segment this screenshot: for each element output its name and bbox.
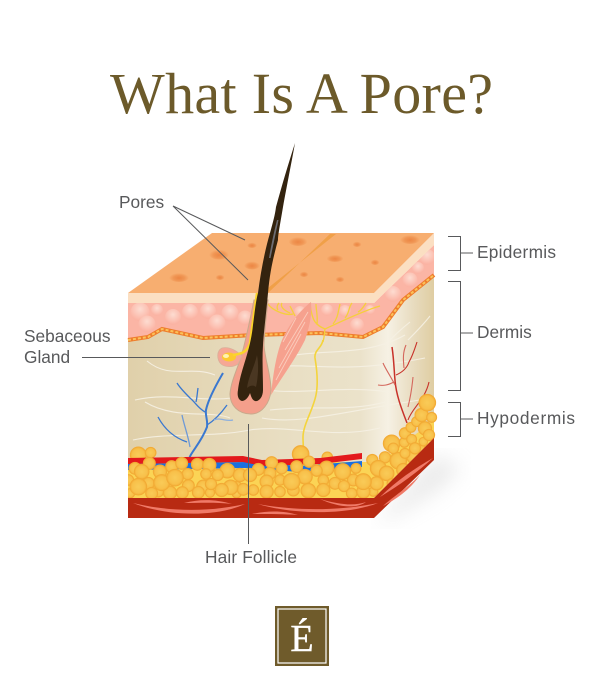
pink epidermis layer bbox=[128, 245, 434, 340]
blue vein branches bbox=[158, 373, 233, 462]
nerve fibre bbox=[303, 340, 323, 458]
bracket label: epidermis: Epidermis bbox=[477, 242, 556, 262]
bracket label: dermis: Dermis bbox=[477, 322, 532, 342]
fat cells bbox=[123, 408, 432, 499]
top cream edge bbox=[128, 233, 434, 303]
logo: É bbox=[290, 618, 314, 660]
callout: hair follicle: Hair Follicle bbox=[205, 547, 297, 567]
nerve endings bbox=[268, 303, 380, 342]
callout: pores bbox=[119, 192, 248, 280]
fat cells behind vessels bbox=[130, 446, 333, 463]
skin cells bbox=[130, 249, 435, 332]
fat layer base bbox=[128, 420, 434, 498]
blood vessels bbox=[128, 453, 362, 472]
top skin surface bbox=[128, 233, 434, 293]
callout: sebaceous gland bbox=[24, 326, 210, 367]
protruding fat cells at side edge bbox=[419, 394, 437, 441]
dermis fibres bbox=[133, 316, 430, 440]
title: What Is A Pore? bbox=[110, 61, 493, 126]
arrector pili muscle bbox=[271, 302, 311, 395]
muscle layer bbox=[128, 438, 434, 518]
skin crease bbox=[268, 234, 336, 293]
bracket label: epidermis bbox=[448, 236, 556, 270]
block shadow bbox=[380, 455, 462, 522]
muscle fibres bbox=[133, 458, 433, 515]
callout: sebaceous gland: Gland bbox=[24, 347, 70, 367]
hair follicle bbox=[230, 300, 271, 414]
hair shaft and bulb bbox=[238, 143, 295, 401]
callout: pores: Pores bbox=[119, 192, 165, 212]
dermis tissue bbox=[128, 275, 434, 500]
skin cross-section diagram bbox=[123, 143, 462, 522]
dermal junction band bbox=[128, 275, 434, 340]
surface pores bbox=[169, 234, 420, 282]
bracket label: dermis bbox=[448, 282, 532, 390]
bracket label: hypodermis: Hypodermis bbox=[477, 408, 575, 428]
logo bbox=[275, 606, 329, 666]
callout: sebaceous gland: Sebaceous bbox=[24, 326, 111, 346]
sebaceous gland bbox=[218, 293, 257, 367]
bracket label: hypodermis bbox=[448, 402, 575, 436]
red artery branches bbox=[378, 342, 429, 423]
